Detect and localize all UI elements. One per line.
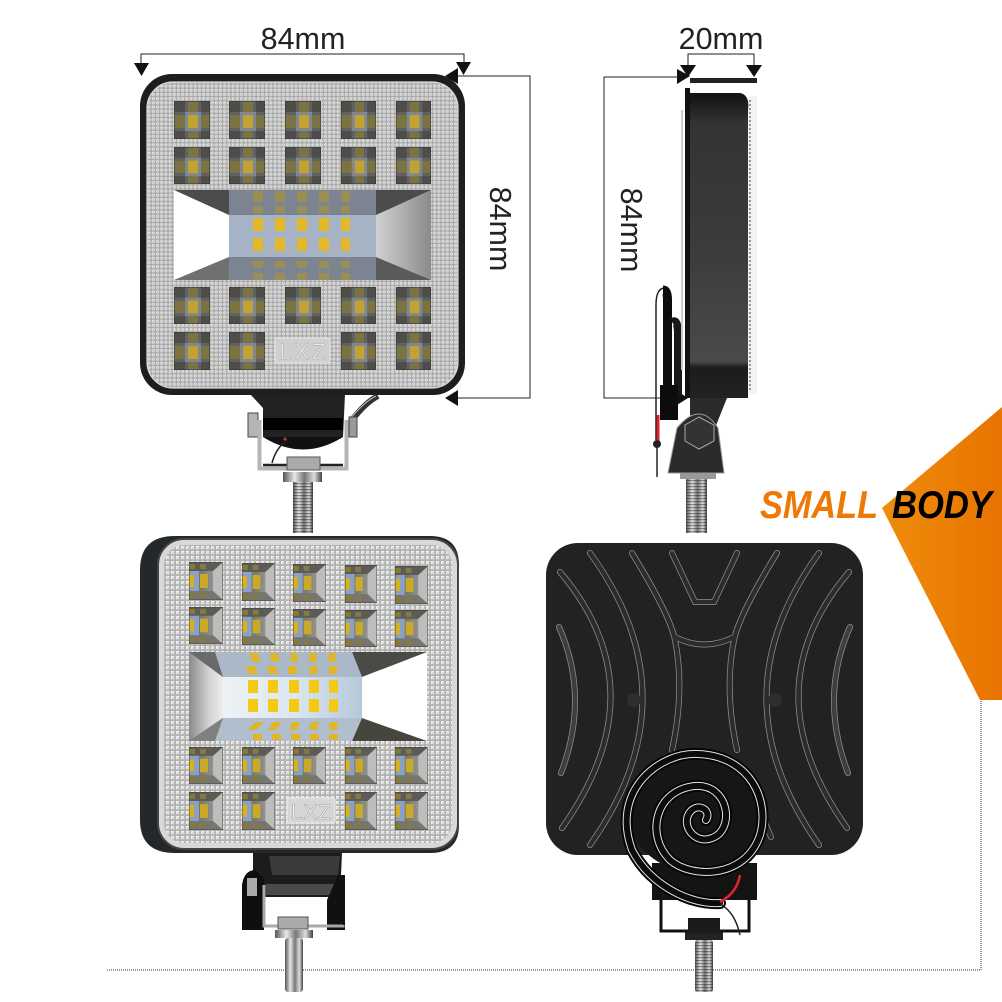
central floodlight <box>189 652 427 741</box>
bottom-left lamp: angled front view <box>140 536 459 992</box>
dimension: side depth 20mm <box>679 22 763 77</box>
side body <box>690 93 748 398</box>
top edge band <box>690 78 757 83</box>
LED chips <box>253 218 350 251</box>
lamp dotted face <box>147 82 458 388</box>
pivot arm <box>690 398 727 428</box>
slanted reflected LEDs <box>246 653 338 740</box>
rear bracket and bolt <box>652 863 757 992</box>
central floodlight <box>174 190 431 280</box>
dimension: side height 84mm <box>604 69 690 405</box>
dimension: side depth 20mm: 20mm <box>679 22 763 56</box>
side bolt <box>686 475 707 533</box>
coil interior shadow <box>628 752 764 872</box>
top lamp: front view <box>140 74 465 533</box>
small LED windows <box>189 562 428 830</box>
rear view lamp <box>546 543 863 992</box>
dimension: front width 84mm: 84mm <box>261 22 345 56</box>
dimension: front width 84mm <box>134 22 471 76</box>
dimension: front height 84mm <box>445 68 530 406</box>
lamp housing <box>140 74 465 395</box>
coiled cable <box>627 754 762 903</box>
side view lamp <box>653 78 757 533</box>
orange corner shape <box>882 407 1002 700</box>
mounting bracket <box>248 394 378 533</box>
front lens edge <box>748 96 757 394</box>
housing <box>140 536 459 853</box>
dim reflected LEDs <box>253 191 350 280</box>
LXZ badge: LXZ <box>280 339 326 364</box>
dimension: front height 84mm: 84mm <box>483 187 517 271</box>
small LED windows <box>174 101 431 370</box>
cable loop <box>653 288 678 477</box>
heading: small body: BODY <box>892 484 995 527</box>
back plate edge <box>685 88 690 398</box>
dotted baseline frame <box>107 701 981 970</box>
bracket <box>242 853 345 992</box>
dotted face <box>158 539 458 849</box>
cooling ribs <box>559 553 850 845</box>
LXZ badge: LXZ <box>291 801 331 824</box>
rear plate <box>546 543 863 855</box>
hex pivot bracket <box>668 414 724 479</box>
dimension: side height 84mm: 84mm <box>614 188 648 272</box>
black wire <box>720 904 740 935</box>
LED chips <box>248 680 338 712</box>
heading: small body: SMALL <box>760 484 878 527</box>
red wire <box>720 875 740 902</box>
